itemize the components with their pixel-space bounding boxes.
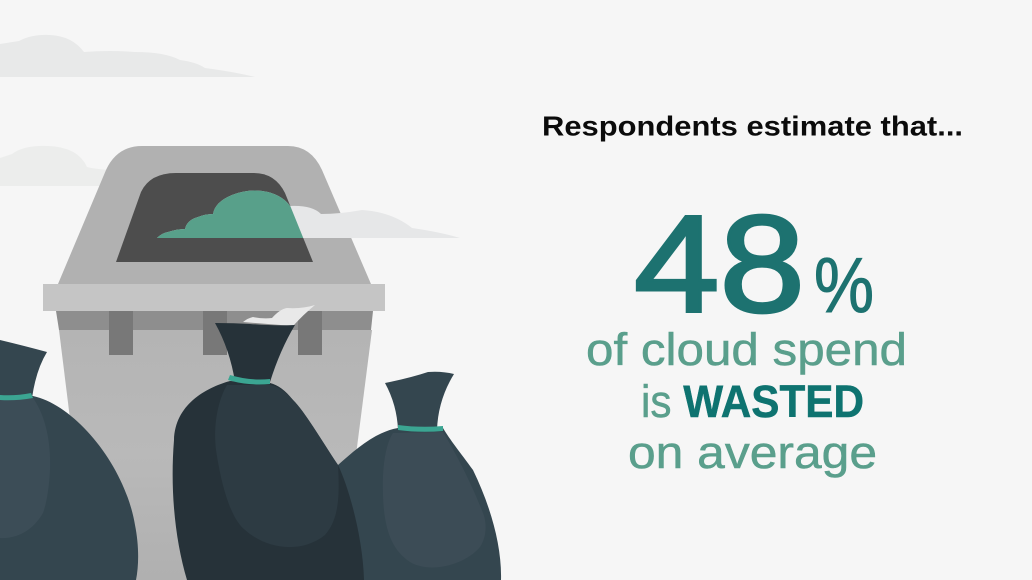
big number 48: 48	[634, 188, 805, 342]
bag tie	[228, 375, 270, 384]
hinge tabs	[109, 311, 322, 355]
line: is WASTED: is WASTED	[641, 376, 864, 427]
band under rim	[56, 311, 373, 330]
bin lid	[58, 146, 371, 284]
bag body	[325, 428, 501, 580]
bin rim	[43, 284, 385, 311]
cloud: top left	[0, 35, 255, 77]
heading: Respondents estimate that...	[542, 110, 963, 142]
bag tie	[0, 393, 33, 400]
line: on average: on average	[628, 427, 877, 478]
bag body	[173, 381, 364, 580]
bag neck	[385, 372, 454, 430]
cloud: passing through bin, grey part	[157, 191, 460, 238]
left garbage bag	[0, 340, 138, 580]
bag highlight	[0, 398, 50, 538]
bag neck	[0, 340, 47, 398]
bin body	[59, 330, 372, 580]
waste bin	[43, 146, 385, 580]
middle garbage bag	[173, 305, 364, 580]
trash poking out	[243, 305, 315, 326]
bin opening	[116, 173, 313, 262]
bag tie	[398, 425, 443, 432]
line: of cloud spend: of cloud spend	[586, 324, 907, 375]
bag neck	[215, 323, 295, 382]
cloud: green part inside bin opening	[157, 190, 304, 238]
right garbage bag	[325, 372, 501, 580]
bag highlight	[215, 385, 339, 547]
bag body	[0, 396, 138, 580]
percent sign: %	[814, 241, 874, 329]
cloud: behind bin	[0, 146, 110, 186]
bag highlight	[383, 432, 486, 567]
